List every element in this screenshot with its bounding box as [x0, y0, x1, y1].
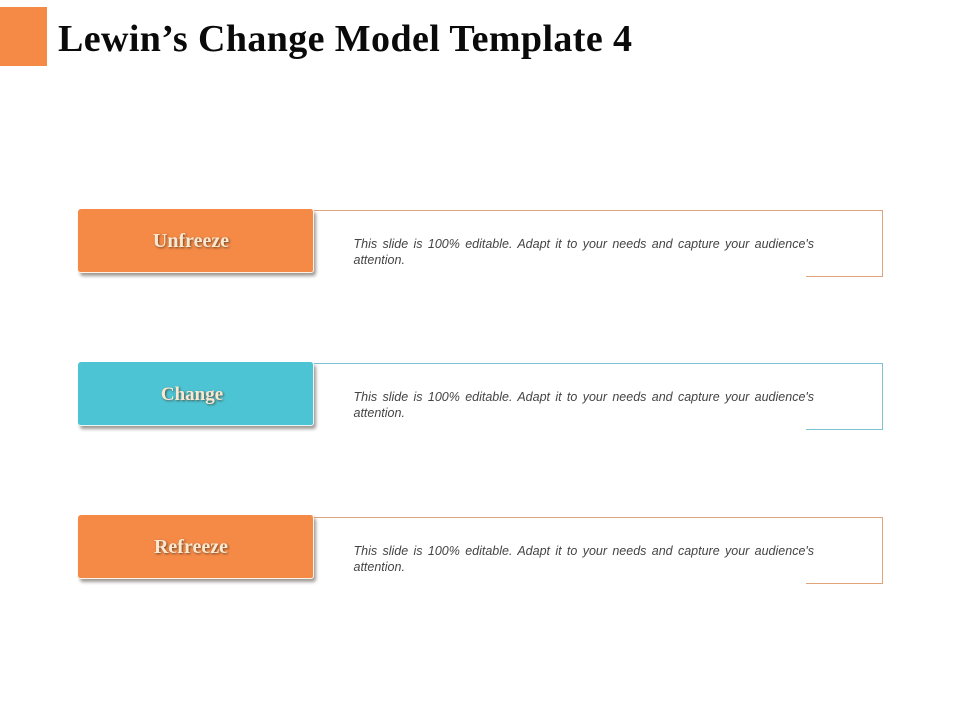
text block: change: attention. [354, 406, 405, 420]
text block: unfreeze: attention. [354, 253, 405, 267]
text block: refreeze: This slide is 100% editable. Adapt it to your needs and capture your audience's [354, 544, 814, 558]
title: Lewin’s Change Model Template 4 [58, 18, 632, 60]
outline: refreeze text frame [314, 517, 883, 584]
outline: change text frame [314, 363, 883, 430]
heading: change: Change [161, 384, 223, 405]
label box: change [78, 362, 314, 426]
text block: change [354, 390, 814, 420]
outline: unfreeze text frame [314, 210, 883, 277]
panel: change [78, 362, 883, 432]
text block: unfreeze: This slide is 100% editable. Adapt it to your needs and capture your audience's [354, 237, 814, 251]
panel: unfreeze [78, 209, 883, 278]
label box: refreeze [78, 515, 314, 579]
panel: refreeze [78, 515, 883, 584]
icon: title accent square [0, 7, 47, 66]
label box: unfreeze [78, 209, 314, 273]
text block: refreeze: attention. [354, 560, 405, 574]
heading: unfreeze: Unfreeze [153, 230, 229, 252]
text block: unfreeze [354, 237, 814, 267]
text block: change: This slide is 100% editable. Adapt it to your needs and capture your audience's [354, 390, 814, 404]
heading: refreeze: Refreeze [154, 536, 228, 558]
text block: refreeze [354, 544, 814, 574]
